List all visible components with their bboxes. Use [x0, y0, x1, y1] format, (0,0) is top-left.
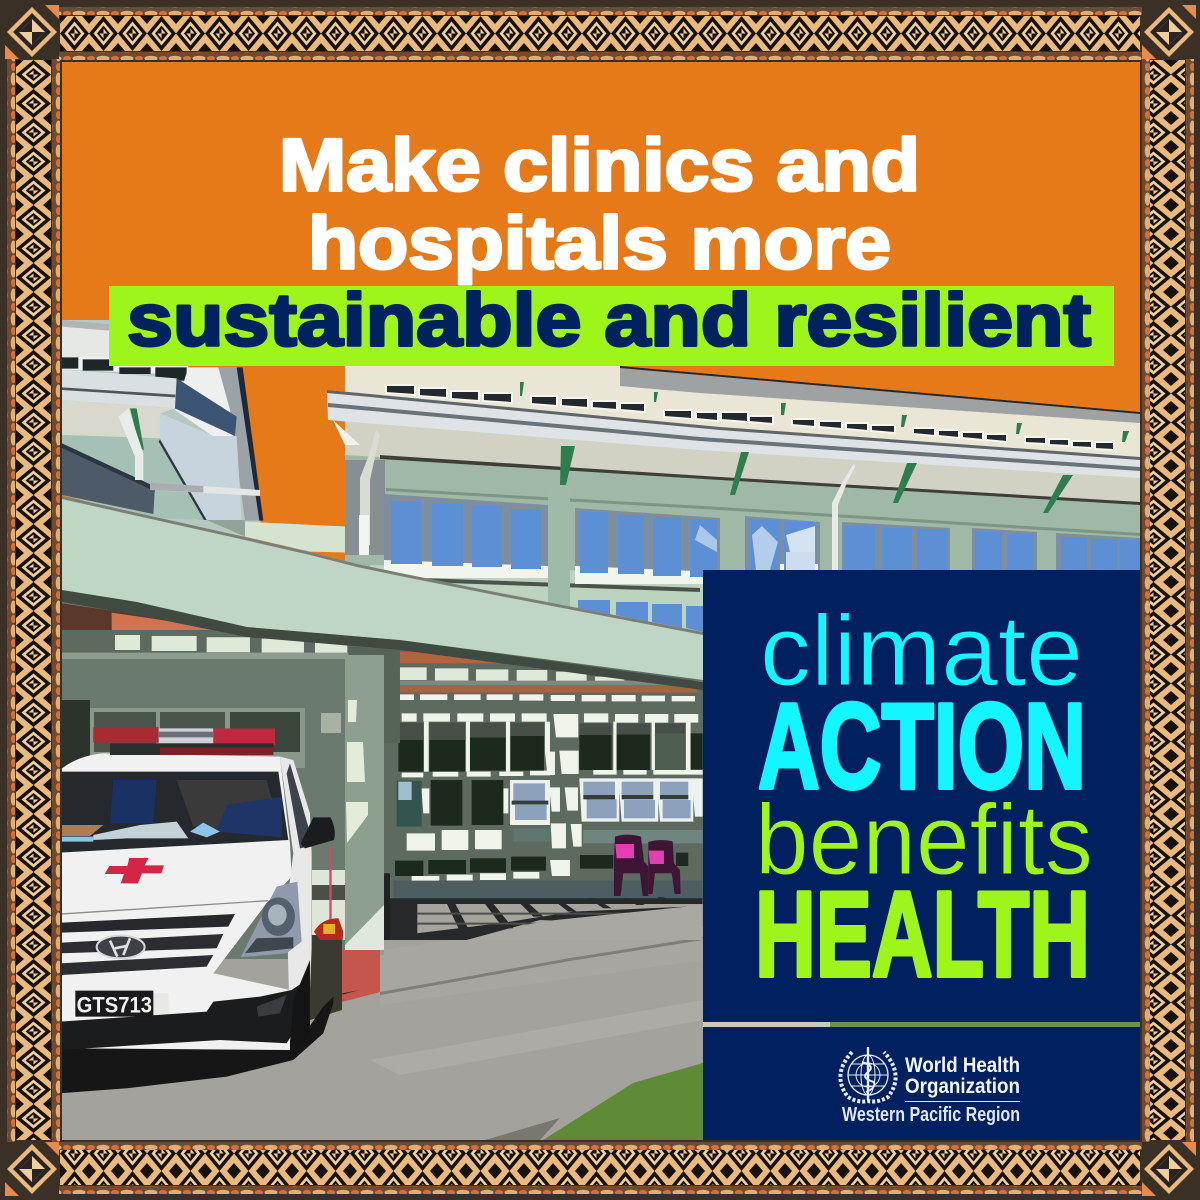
shadow [60, 997, 333, 1093]
WHO logo panel: Organization [905, 1075, 1020, 1098]
side mirror [301, 817, 335, 848]
clouds in window reflection [752, 526, 778, 570]
dark panes [395, 733, 703, 876]
asphalt ground [62, 880, 1140, 1140]
downpipes [360, 430, 380, 545]
ground shade [383, 898, 703, 940]
title: hospitals more [308, 202, 891, 284]
pale patch [245, 522, 351, 553]
wall [345, 455, 1140, 640]
horizontal pipe [150, 483, 260, 496]
icon: red cross [105, 858, 164, 883]
downpipe [130, 408, 144, 450]
bonnet line [62, 900, 268, 915]
column shade [384, 873, 390, 940]
dado [393, 881, 703, 899]
organisation name: World Health [905, 1054, 1020, 1077]
brackets [560, 446, 575, 485]
rafter bricks [400, 652, 502, 664]
hospital photograph [60, 320, 1140, 1140]
icon: WHO emblem [840, 1047, 896, 1102]
left upper building [62, 320, 351, 553]
callout: climate action benefits health panel [703, 570, 1140, 1022]
ambulance [60, 727, 343, 1093]
main windows [384, 494, 1140, 632]
right main building [327, 366, 1140, 640]
clerestory windows [386, 385, 1114, 450]
title [279, 124, 920, 284]
windscreen [60, 772, 288, 853]
purple chairs [614, 835, 681, 896]
number plate: GTS713 [77, 993, 152, 1018]
roof [345, 366, 1140, 478]
title: Make clinics and [279, 124, 920, 206]
grass verge [543, 1063, 703, 1140]
headlight [241, 882, 302, 957]
lower wall [370, 565, 703, 631]
body [60, 753, 292, 1050]
region name: Western Pacific Region [842, 1104, 1020, 1126]
lower bumper [60, 983, 303, 1050]
highlighted subtitle: sustainable and resilient [127, 278, 1091, 362]
fascia [62, 369, 177, 408]
balcony [62, 443, 155, 514]
soffit [345, 420, 1140, 505]
roof lights [93, 727, 159, 743]
opened louvre windows [510, 778, 703, 825]
side of the van [280, 756, 312, 990]
ambulance bay back wall [62, 659, 348, 959]
benefits: benefits [755, 784, 1093, 896]
fascia [327, 390, 1140, 478]
ambulance bay [60, 587, 400, 743]
WHO logo panel [703, 1027, 1140, 1140]
shaded walkway and windows [380, 640, 703, 940]
pale green curved canopy [62, 496, 703, 690]
climate: climate [760, 595, 1083, 707]
grille [62, 914, 235, 975]
broom [329, 847, 332, 920]
concrete column [310, 655, 384, 1020]
hyundai badge [97, 936, 145, 958]
